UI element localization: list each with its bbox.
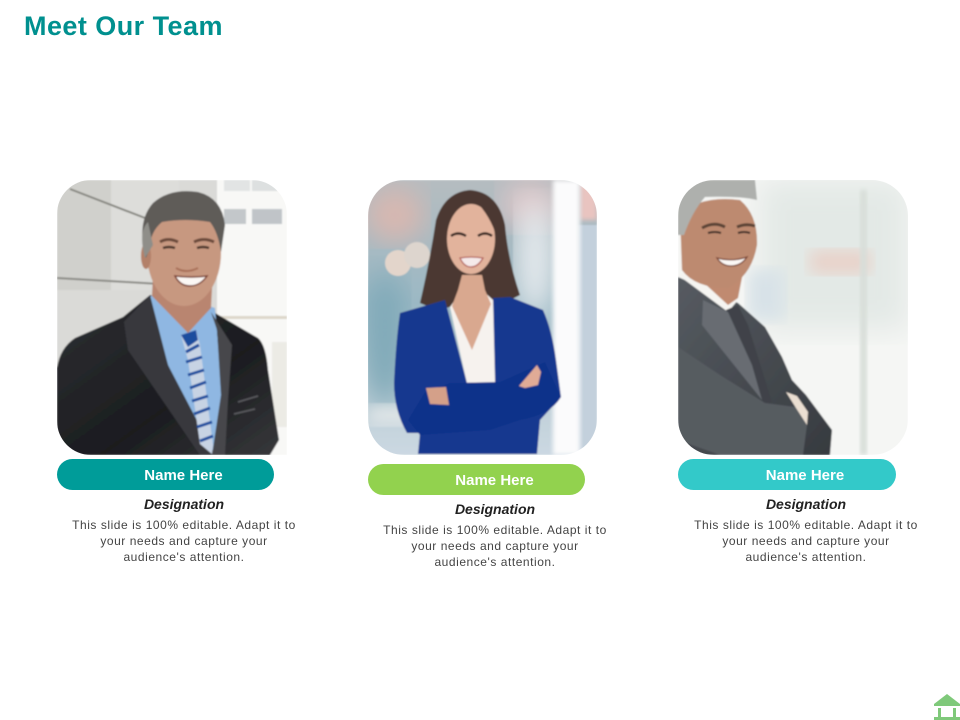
description 1: your needs and capture your bbox=[100, 534, 268, 548]
description 2: audience's attention. bbox=[434, 555, 556, 569]
lapels bbox=[124, 295, 215, 455]
tie bbox=[181, 330, 213, 454]
blouse and neck bbox=[450, 290, 495, 383]
eyes bbox=[451, 234, 492, 236]
hair bbox=[678, 180, 757, 235]
description 1: audience's attention. bbox=[123, 550, 245, 564]
wall background bbox=[57, 180, 287, 455]
description 1: This slide is 100% editable. Adapt it to bbox=[72, 518, 296, 532]
hands bbox=[426, 387, 449, 405]
collar bbox=[684, 280, 737, 312]
designation 3: Designation bbox=[766, 496, 846, 512]
hair bbox=[420, 190, 520, 308]
designation 2: Designation bbox=[455, 501, 535, 517]
mouth bbox=[460, 257, 483, 267]
shirt bbox=[148, 290, 222, 453]
smile bbox=[717, 257, 747, 266]
description 2: your needs and capture your bbox=[411, 539, 579, 553]
portrait photo 1: man in dark suit bbox=[57, 180, 287, 455]
face bbox=[680, 199, 757, 288]
description 3 bbox=[694, 518, 918, 564]
eyes bbox=[702, 224, 755, 228]
portrait photo 3: older man with grey suit bbox=[678, 180, 908, 455]
description 1 bbox=[72, 518, 296, 564]
name pill 1 bbox=[57, 459, 274, 490]
description 2 bbox=[383, 523, 607, 569]
face bbox=[148, 219, 222, 306]
face bbox=[447, 204, 495, 274]
lapel bbox=[702, 300, 762, 400]
neck bbox=[151, 281, 213, 334]
blurred background bbox=[678, 180, 908, 455]
smile bbox=[175, 276, 207, 286]
name pill 2 bbox=[368, 464, 585, 495]
blazer bbox=[394, 297, 561, 454]
blurred background bbox=[363, 180, 597, 455]
name pill 3 bbox=[678, 459, 896, 490]
description 3: audience's attention. bbox=[745, 550, 867, 564]
crossed arm bbox=[408, 362, 561, 435]
title: Meet Our Team bbox=[24, 11, 223, 41]
nose shadow bbox=[176, 268, 198, 271]
tie bbox=[725, 306, 760, 372]
suit pocket bbox=[234, 396, 258, 414]
description 3: your needs and capture your bbox=[722, 534, 890, 548]
designation 1: Designation bbox=[144, 496, 224, 512]
description 3: This slide is 100% editable. Adapt it to bbox=[694, 518, 918, 532]
sleeve cross bbox=[678, 347, 807, 455]
suit bbox=[678, 277, 832, 455]
eyes and brows bbox=[160, 240, 214, 242]
name pill 2: Name Here bbox=[455, 472, 534, 489]
neck bbox=[707, 277, 742, 306]
suit bbox=[57, 295, 279, 455]
name pill 1: Name Here bbox=[144, 467, 223, 484]
description 2: This slide is 100% editable. Adapt it to bbox=[383, 523, 607, 537]
hair bbox=[142, 191, 225, 258]
name pill 3: Name Here bbox=[766, 467, 844, 484]
ears bbox=[141, 243, 151, 269]
portrait photo 2: woman in blue blazer bbox=[368, 180, 597, 455]
bangs bbox=[482, 207, 495, 230]
